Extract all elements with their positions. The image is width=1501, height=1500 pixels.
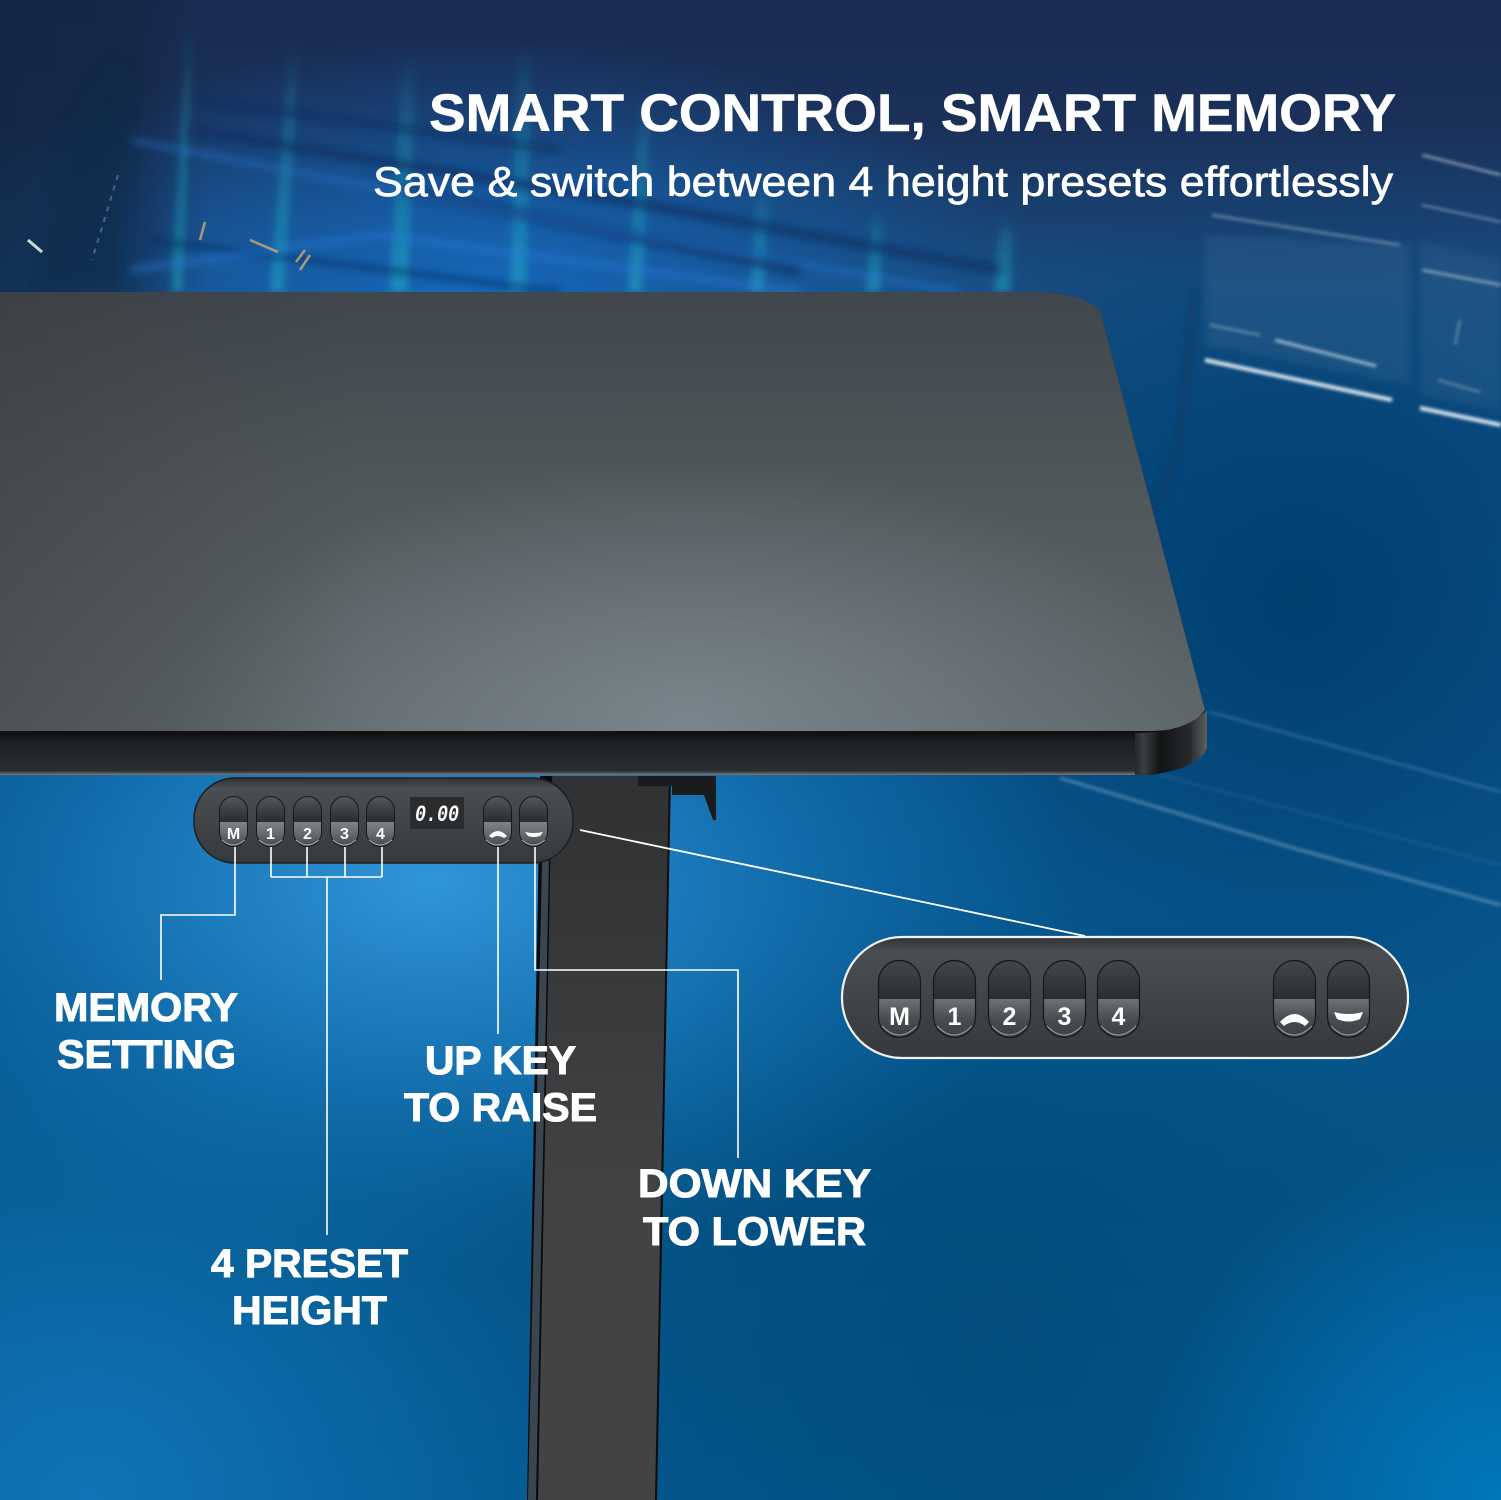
desktop front edge	[0, 710, 1207, 775]
memory button	[219, 796, 248, 847]
enlarged preset 1	[933, 960, 976, 1038]
desktop surface	[0, 290, 1210, 775]
background: window sills on the right	[1150, 155, 1501, 530]
desk leg	[527, 776, 671, 1500]
enlarged control panel callout	[842, 937, 1408, 1058]
label: down key to lower: TO LOWER	[643, 1210, 866, 1254]
label: up key to raise: TO RAISE	[404, 1086, 597, 1130]
label: up key to raise: UP KEY	[425, 1039, 576, 1083]
preset 4 button: 4	[376, 826, 385, 843]
control panel on desk	[194, 778, 573, 863]
label: 4 preset height: HEIGHT	[232, 1289, 387, 1333]
leader line: down key	[535, 847, 738, 1158]
height display: 0.00	[415, 802, 459, 828]
enlarged preset 3: 3	[1058, 1003, 1071, 1031]
leader line: presets	[271, 847, 382, 1235]
preset 2 button	[293, 796, 322, 847]
desktop top face	[0, 290, 1210, 735]
leader line: memory setting	[161, 847, 235, 980]
label: down key to lower: DOWN KEY	[638, 1162, 871, 1206]
label: 4 preset height	[211, 1242, 408, 1333]
subtitle: Save & switch between 4 height presets effortlessly	[373, 158, 1393, 205]
memory button: M	[227, 826, 240, 843]
enlarged preset 2: 2	[1003, 1003, 1016, 1031]
enlarged preset 2	[988, 960, 1031, 1038]
leader line: up key	[497, 847, 499, 1034]
title: SMART CONTROL, SMART MEMORY	[429, 84, 1396, 143]
label: up key to raise	[404, 1039, 597, 1130]
warm specks	[200, 222, 310, 270]
enlarged memory button	[878, 960, 921, 1038]
preset 1 button	[256, 796, 285, 847]
enlarged preset 3	[1043, 960, 1086, 1038]
leg mounting bracket	[638, 776, 716, 820]
label: down key to lower	[638, 1162, 871, 1254]
preset 3 button: 3	[340, 826, 349, 843]
preset 2 button: 2	[303, 826, 312, 843]
enlarged down button	[1327, 960, 1370, 1038]
background: floor streaks lower right	[1060, 712, 1501, 905]
preset 1 button: 1	[266, 826, 275, 843]
enlarged up button	[1273, 960, 1316, 1038]
down button	[519, 796, 548, 847]
leader line: zoom callout	[580, 830, 1085, 936]
enlarged preset 4	[1097, 960, 1140, 1038]
height display	[410, 797, 464, 829]
enlarged preset 4: 4	[1112, 1003, 1126, 1031]
preset 3 button	[330, 796, 359, 847]
preset 4 button	[366, 796, 395, 847]
enlarged preset 1: 1	[948, 1003, 962, 1031]
label: memory setting: MEMORY	[54, 986, 238, 1030]
label: 4 preset height: 4 PRESET	[211, 1242, 408, 1286]
up button	[483, 796, 512, 847]
enlarged memory button: M	[889, 1003, 910, 1031]
label: memory setting: SETTING	[57, 1033, 236, 1077]
panel body	[194, 778, 573, 863]
label: memory setting	[54, 986, 238, 1077]
machinery silhouette at far left	[30, 60, 130, 292]
